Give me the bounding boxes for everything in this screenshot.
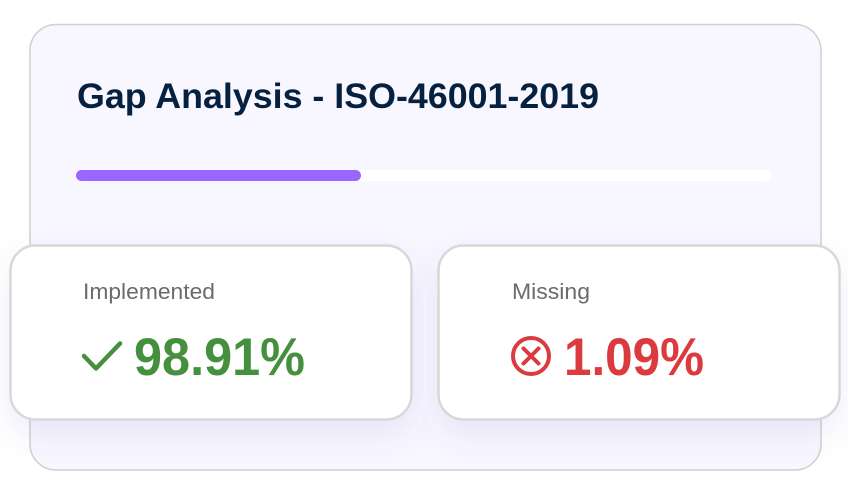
value: missing percentage: 1.09% bbox=[564, 328, 704, 387]
progress bar bbox=[76, 170, 772, 181]
icon: cross in circle bbox=[513, 338, 549, 374]
panel: missing bbox=[438, 246, 840, 420]
icon: check mark bbox=[84, 344, 120, 368]
value: implemented percentage: 98.91% bbox=[134, 328, 305, 387]
title: Gap Analysis - ISO-46001-2019 bbox=[77, 77, 599, 116]
label: implemented: Implemented bbox=[83, 279, 215, 304]
panel: implemented bbox=[10, 246, 412, 420]
label: missing: Missing bbox=[512, 279, 590, 304]
